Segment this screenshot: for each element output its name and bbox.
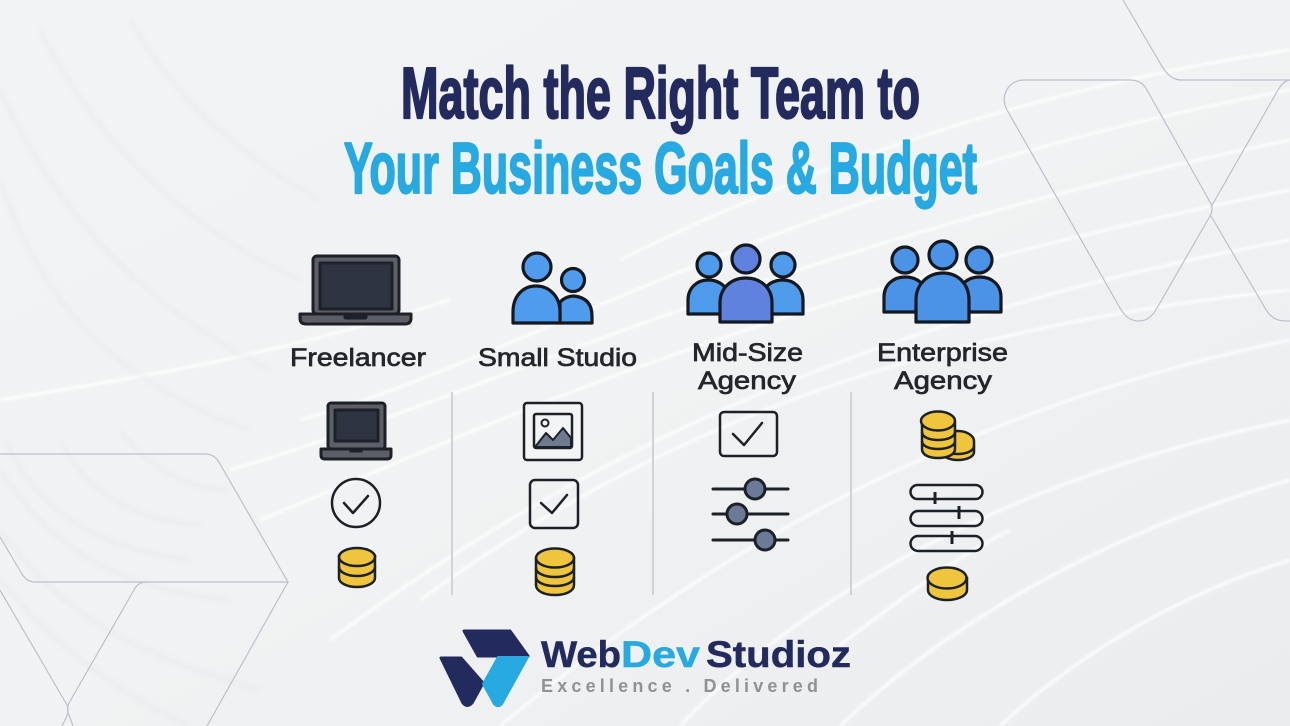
icon: mid-size agency team	[688, 245, 803, 322]
title	[344, 54, 977, 209]
label: Freelancer: Freelancer	[290, 344, 426, 372]
icon: small studio image	[524, 403, 582, 460]
icon: small studio coins	[536, 548, 574, 595]
decorative outline shapes top right	[1004, 0, 1290, 321]
icon: freelancer laptop small	[321, 403, 391, 459]
logo mark	[441, 631, 528, 706]
label: Enterprise Agency	[877, 339, 1008, 395]
label: Mid-Size Agency: Mid-Size	[692, 339, 803, 367]
label: Mid-Size Agency: Agency	[698, 367, 797, 395]
label: Enterprise Agency: Enterprise	[877, 339, 1008, 367]
logo wordmark	[541, 634, 851, 675]
decorative outline shapes bottom left	[0, 454, 288, 726]
label: Enterprise Agency: Agency	[894, 367, 993, 395]
title: Match the Right Team to	[401, 54, 920, 134]
logo wordmark: Studioz	[706, 634, 851, 675]
icon: freelancer coins	[339, 548, 375, 587]
icon: mid-size sliders	[713, 479, 788, 550]
icon: freelancer laptop	[300, 256, 411, 324]
icon: mid-size check box	[720, 412, 777, 456]
logo wordmark: Dev	[621, 634, 700, 675]
label: Mid-Size Agency	[692, 339, 803, 395]
icon: enterprise agency team	[884, 241, 1001, 322]
logo wordmark: Web	[541, 634, 621, 675]
icon: enterprise sliders	[910, 485, 982, 551]
icon: enterprise coins	[921, 412, 974, 460]
icon: small studio team	[513, 253, 592, 323]
logo tagline: Excellence . Delivered	[541, 676, 818, 696]
icon: freelancer check circle	[332, 479, 380, 527]
icon: enterprise coin	[928, 568, 967, 600]
icon: small studio check box	[530, 480, 578, 528]
label: Small Studio: Small Studio	[478, 344, 637, 372]
